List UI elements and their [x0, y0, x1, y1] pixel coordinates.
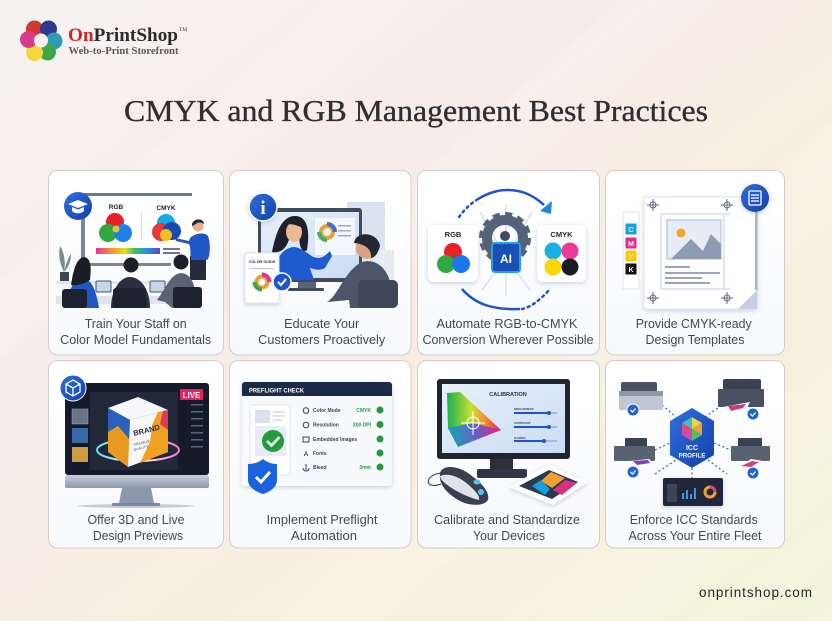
panel: preflight automation [230, 360, 411, 548]
calibration sliders: CONTRAST [514, 421, 531, 425]
wordmark: OnPrintShop [68, 26, 178, 46]
label: Provide CMYK-ready [636, 317, 752, 331]
icon: AI chip: AI [500, 252, 512, 266]
RGB box: RGB [445, 230, 462, 239]
label: Educate Your [284, 317, 359, 331]
RGB box [428, 225, 478, 282]
spectrophotometer [428, 467, 488, 505]
CMYK box [537, 225, 586, 282]
colour guide [245, 253, 279, 303]
label [258, 317, 386, 347]
label: Enforce ICC Standards [630, 513, 758, 527]
icon: check badge [273, 273, 291, 291]
monitor [437, 379, 570, 478]
panel: calibrate devices [418, 360, 600, 548]
row: bleed: 3mm [359, 465, 372, 471]
thumbnails [72, 409, 88, 462]
label: Automation [291, 529, 357, 543]
ICC profile hexagon: PROFILE [679, 452, 705, 460]
dashboard device [663, 478, 723, 506]
icon: graduation cap [64, 192, 92, 220]
icon: info bubble: i [260, 198, 266, 219]
label [628, 513, 762, 543]
label [636, 317, 752, 347]
3D product box: QUALITY [133, 444, 149, 452]
label [266, 513, 378, 543]
row: fonts [304, 450, 384, 458]
arrow: top arc [459, 190, 552, 217]
checklist [303, 406, 384, 471]
screen panel with wheel [315, 218, 355, 255]
panel: design templates [606, 170, 784, 355]
CMYK swatch strip: K [628, 267, 634, 274]
label: Offer 3D and Live [88, 513, 185, 527]
row: embedded images: Embedded Images [313, 437, 357, 443]
desk [56, 281, 175, 284]
preflight window [242, 382, 392, 486]
label: Train Your Staff on [85, 317, 187, 331]
icon: green check [262, 430, 284, 452]
background document [347, 202, 385, 250]
student middle [111, 258, 150, 308]
template document [644, 197, 758, 309]
logo [20, 20, 187, 61]
preflight window: PREFLIGHT CHECK [249, 388, 305, 394]
CMYK swatch strip: C [628, 227, 634, 234]
label: Color Model Fundamentals [60, 333, 211, 347]
monitor [65, 383, 209, 508]
ICC profile hexagon: ICC [686, 445, 698, 452]
dotted connectors [655, 405, 731, 478]
label: Customers Proactively [258, 333, 386, 347]
row: resolution [303, 421, 384, 428]
row: color mode: Color Mode [313, 408, 341, 414]
circuit rays [480, 204, 532, 296]
gamut chart [447, 392, 501, 447]
CMYK box: CMYK [550, 230, 573, 239]
icon: colour petals [20, 20, 62, 61]
calibration sliders [489, 392, 557, 443]
label [88, 513, 185, 543]
label [422, 317, 594, 347]
icon: info bubble [249, 193, 277, 221]
label: Calibrate and Standardize [434, 513, 580, 527]
panel: 3D previews [48, 360, 224, 548]
student right [157, 254, 202, 308]
tagline: Web-to-Print Storefront [68, 46, 179, 57]
calibration sliders: GAMMA [514, 436, 526, 440]
label: Your Devices [473, 529, 545, 543]
icon: AI chip [492, 243, 520, 272]
row: fonts: A [304, 451, 309, 458]
trademark: TM [179, 27, 187, 33]
live badge [180, 389, 203, 400]
label: Automate RGB-to-CMYK [436, 317, 578, 331]
student left [62, 257, 99, 308]
panel: ICC standards [606, 360, 784, 548]
icon: gear [482, 214, 528, 262]
presentation board: CMYK [156, 205, 176, 212]
ICC profile hexagon [670, 408, 714, 468]
arrow: bottom arc [462, 289, 550, 309]
3D product box [97, 397, 179, 467]
colour chart [508, 465, 588, 505]
panel: train your staff [48, 170, 224, 355]
CMYK swatch strip: M [628, 241, 634, 248]
live badge: LIVE [183, 391, 201, 400]
plant [59, 246, 71, 281]
row: fonts: Fonts [313, 451, 327, 457]
label [60, 317, 211, 347]
row: resolution: Resolution [313, 422, 339, 428]
monitor [258, 208, 362, 291]
label: Conversion Wherever Possible [422, 333, 594, 347]
website url: onprintshop.com [699, 585, 812, 600]
row: bleed [303, 464, 384, 471]
customer [327, 234, 398, 308]
icon: template badge [741, 184, 769, 212]
laptop left [96, 281, 111, 292]
panel: educate customers [230, 170, 411, 355]
title: CMYK and RGB Management Best Practices [124, 93, 708, 128]
label [434, 513, 580, 543]
row: resolution: 300 DPI [353, 422, 372, 428]
row: color mode [303, 406, 384, 414]
label: Design Templates [646, 333, 744, 347]
calibration sliders: BRIGHTNESS [514, 407, 534, 411]
CMYK swatch strip: Y [629, 254, 634, 261]
row: bleed: Bleed [313, 465, 327, 471]
label: Implement Preflight [266, 513, 378, 527]
document [250, 405, 290, 475]
3D product box: BRAND [132, 423, 161, 438]
check badges [627, 404, 759, 479]
row: color mode: CMYK [356, 408, 371, 414]
background panel [340, 250, 394, 290]
presenter [175, 219, 210, 280]
support agent [272, 216, 332, 280]
calibration sliders: CALIBRATION [489, 392, 527, 398]
label: Across Your Entire Fleet [628, 529, 762, 543]
side controls [191, 404, 203, 448]
panel: automate conversion [418, 170, 600, 355]
printer middle left [614, 438, 655, 467]
colour guide: COLOR GUIDE [249, 260, 276, 264]
printer top left [619, 382, 663, 410]
printer top right [718, 379, 764, 414]
label: Design Previews [93, 529, 183, 543]
CMYK swatch strip [623, 212, 639, 289]
icon: cube badge [60, 375, 86, 401]
icon: shield [248, 459, 277, 494]
3D product box: PREMIUM [133, 439, 150, 447]
laptop right [150, 281, 165, 292]
presentation board [81, 193, 192, 266]
crop marks [647, 199, 733, 304]
printer middle right [731, 438, 770, 469]
presentation board: RGB [109, 204, 124, 211]
